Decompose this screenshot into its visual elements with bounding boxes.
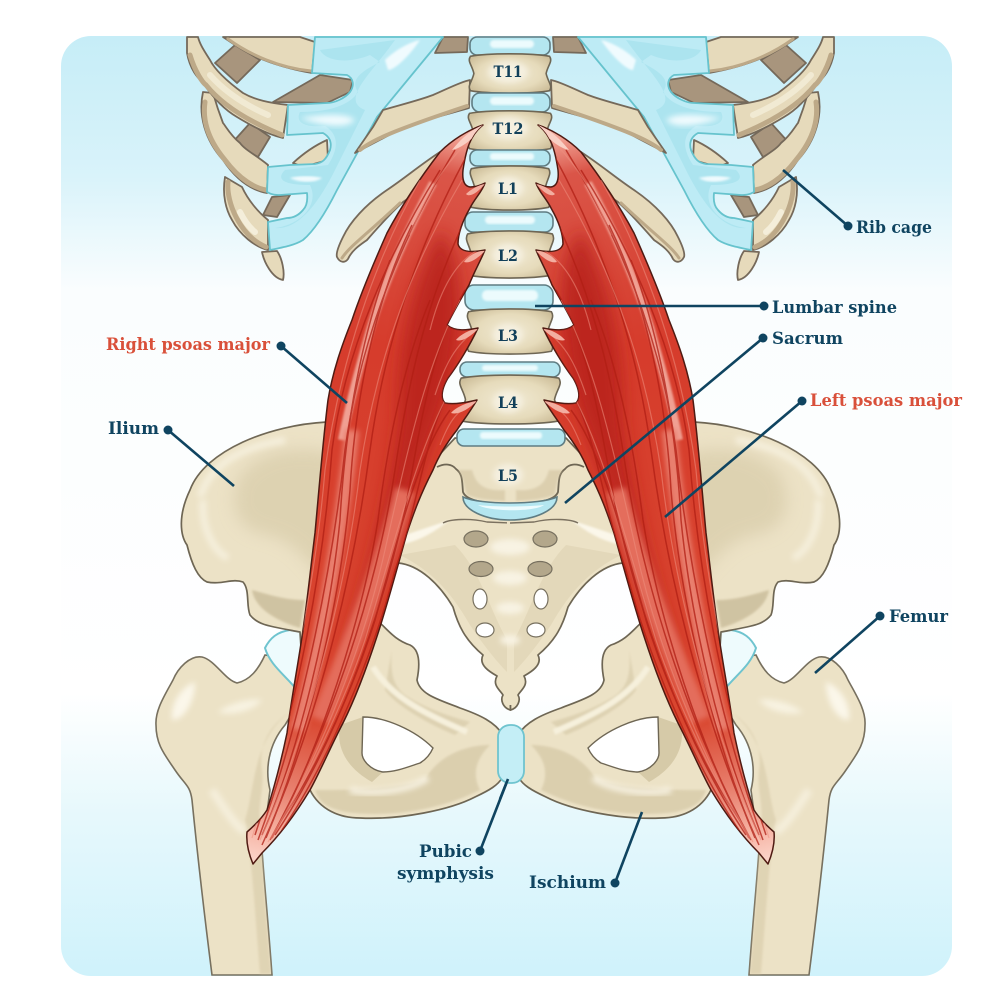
ilium fossa shading [234, 449, 340, 590]
label: Lumbar spine: Lumbar spine [772, 298, 897, 317]
pelvis half: right [507, 422, 840, 818]
cartilage [267, 37, 443, 250]
vertebra labels: T11 [494, 62, 522, 81]
disc L4-L5 [457, 429, 565, 446]
label: Sacrum: Sacrum [772, 329, 844, 348]
label: Femur [815, 607, 948, 673]
fibres [255, 150, 470, 845]
label: Pubic symphysis: symphysis [397, 864, 494, 883]
left-side psoas major muscle (viewer left) [247, 125, 485, 864]
vertebra labels: L4 [498, 393, 518, 412]
vertebra T11 [469, 54, 551, 93]
pelvis half: left ilium, ischium, sacrum [181, 422, 514, 818]
vertebra labels: L2 [498, 246, 518, 265]
vertebra L2 [466, 231, 554, 278]
dark core [335, 230, 460, 680]
vertebra L3 [467, 309, 553, 354]
label: Ilium [108, 419, 234, 486]
label: Pubic symphysis: Pubic [419, 842, 472, 861]
vertebra T12 [468, 111, 552, 151]
disc L3-L4 [460, 362, 560, 377]
label: Rib cage: Rib cage [856, 218, 932, 237]
label: Ischium: Ischium [529, 873, 607, 892]
label: Ilium: Ilium [108, 419, 160, 438]
femur: left [156, 630, 303, 975]
rib cage: left side [187, 37, 470, 280]
label: Pubic symphysis [397, 779, 508, 883]
disc L5-sacrum [463, 497, 557, 520]
right-side psoas major muscle (viewer right) [536, 125, 774, 864]
disc T12-L1 [470, 150, 550, 166]
seam cover [507, 441, 514, 705]
vertebra labels: L1 [498, 179, 518, 198]
rib cage: right side [551, 37, 834, 280]
disc L2-L3 [465, 285, 553, 310]
label: Left psoas major [665, 391, 962, 517]
vertebra labels: L3 [498, 326, 518, 345]
sacral foramina [464, 531, 488, 547]
disc T11-T12 [472, 93, 550, 112]
sacrum centre highlights [490, 539, 530, 645]
label: Sacrum [565, 329, 844, 503]
label: Left psoas major: Left psoas major [810, 391, 962, 410]
vertebra labels: T12 [492, 119, 524, 138]
vertebra L1 [470, 166, 550, 210]
label: Rib cage [783, 170, 932, 237]
lower rib [355, 80, 470, 153]
pubic symphysis cartilage [498, 725, 524, 799]
label: Ischium [529, 812, 642, 892]
obturator foramen [339, 717, 383, 782]
label: Lumbar spine [535, 298, 897, 317]
vertebra labels: L5 [498, 466, 518, 485]
disc L1-L2 [465, 212, 553, 232]
slip tips [451, 184, 485, 413]
label: Right psoas major [106, 335, 347, 403]
spine [457, 37, 565, 520]
label: Femur: Femur [889, 607, 948, 626]
light streaks [342, 183, 433, 440]
label: Right psoas major: Right psoas major [106, 335, 270, 354]
vertebra labels [488, 61, 528, 486]
ala of sacrum [400, 520, 450, 545]
vertebra L4 [460, 375, 560, 424]
femur: right [718, 630, 865, 975]
disc above T11 [470, 37, 550, 55]
hip joint cartilage [265, 630, 303, 690]
